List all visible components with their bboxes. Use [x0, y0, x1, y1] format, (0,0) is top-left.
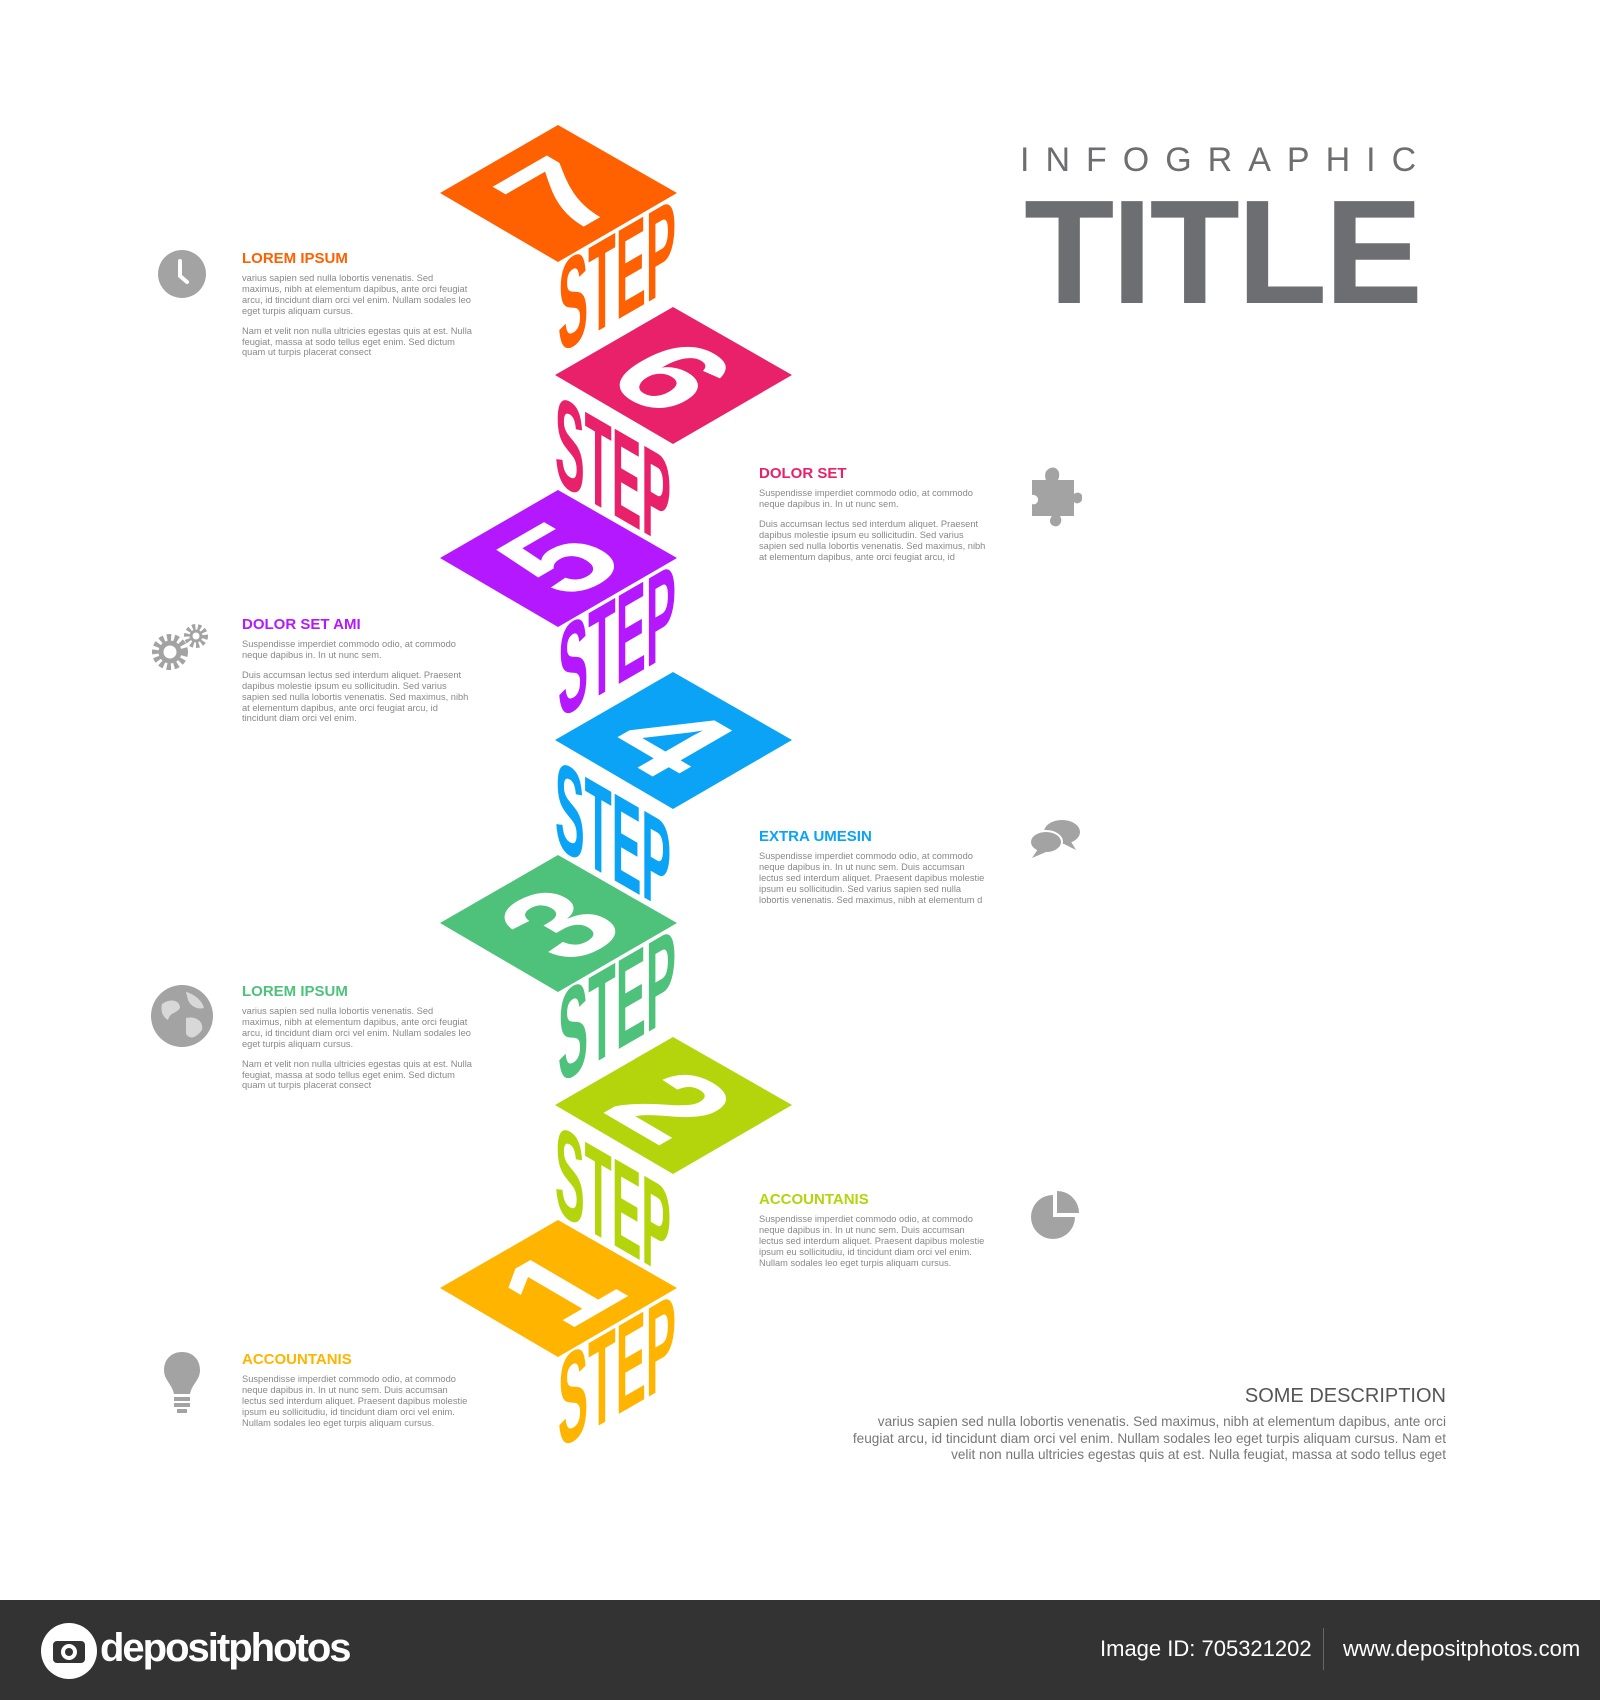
text: step 7: varius sapien sed nulla lobortis venenatis. Sed maximus, nibh at elementum dapibus, ante orci feugiat arcu, id tincidunt diam orci vel enim. Nullam sodales leo eget turpis aliquam cursus.: [242, 273, 471, 316]
step 4: [555, 672, 792, 940]
step 7: [440, 125, 677, 382]
steps staircase: STEP: [558, 901, 676, 1112]
step 6: 6: [574, 321, 768, 433]
text: step 4: EXTRA UMESIN: [759, 828, 872, 845]
step 2: [555, 1037, 792, 1305]
website: www.depositphotos.com: [1343, 1636, 1580, 1661]
description: varius sapien sed nulla lobortis venenatis. Sed maximus, nibh at elementum dapibus, ante orci: [878, 1414, 1446, 1429]
steps staircase: STEP: [558, 1266, 676, 1477]
step 3: 3: [463, 868, 657, 981]
logo: depositphotos: [100, 1626, 350, 1670]
logo: [41, 1623, 350, 1679]
text: step 6: Suspendisse imperdiet commodo odio, at commodo neque dapibus in. In ut nunc sem.: [759, 488, 973, 509]
footer bar: [0, 1600, 1600, 1700]
step 2: 2: [574, 1051, 768, 1163]
text: step 3: Nam et velit non nulla ultricies egestas quis at est. Nulla feugiat, massa at sodo tellus eget enim. Sed dictum quam ut turpis placerat consect: [242, 1059, 472, 1090]
steps staircase: STEP: [558, 536, 676, 747]
text: step 2: [759, 1191, 984, 1268]
step 2: STEP: [555, 1097, 671, 1305]
icon: gears: [152, 624, 208, 670]
text: step 7: Nam et velit non nulla ultricies egestas quis at est. Nulla feugiat, massa at sodo tellus eget enim. Sed dictum quam ut turpis placerat consect: [242, 326, 472, 357]
icon: clock: [158, 250, 206, 298]
text: step 2: ACCOUNTANIS: [759, 1191, 869, 1208]
text: step 1: Suspendisse imperdiet commodo odio, at commodo neque dapibus in. In ut nunc sem. Duis accumsan lectus sed interdum aliquet. Praesent dapibus molestie ipsum eu sollicitudiu, id tincidunt diam orci vel enim. Nullam sodales leo eget turpis aliquam cursus.: [242, 1374, 467, 1428]
text: step 5: [242, 616, 468, 723]
text: step 3: [242, 983, 472, 1090]
text: step 6: Duis accumsan lectus sed interdum aliquet. Praesent dapibus molestie ipsum eu sollicitudin. Sed varius sapien sed nulla lobortis venenatis. Sed maximus, nibh at elementum dapibus, ante orci feugiat arcu, id: [759, 519, 985, 562]
title: INFOGRAPHIC: [1020, 141, 1432, 179]
step 6: STEP: [555, 367, 671, 575]
title: TITLE: [1024, 170, 1420, 335]
text: step 5: DOLOR SET AMI: [242, 616, 361, 633]
text: step 5: Suspendisse imperdiet commodo odio, at commodo neque dapibus in. In ut nunc sem.: [242, 639, 456, 660]
step 1: [440, 1220, 677, 1477]
steps staircase: STEP: [558, 171, 676, 382]
step 1: 1: [463, 1233, 657, 1346]
description: [853, 1385, 1446, 1462]
text: step 2: Suspendisse imperdiet commodo odio, at commodo neque dapibus in. In ut nunc sem. Duis accumsan lectus sed interdum aliquet. Praesent dapibus molestie ipsum eu sollicitudiu, id tincidunt diam orci vel enim. Nullam sodales leo eget turpis aliquam cursus.: [759, 1214, 984, 1268]
text: step 7: [242, 250, 472, 357]
step 6: [555, 307, 792, 575]
text: step 6: DOLOR SET: [759, 465, 847, 482]
icon: pie chart: [1031, 1191, 1079, 1239]
text: step 7: LOREM IPSUM: [242, 250, 348, 267]
step 5: [440, 490, 677, 747]
text: step 4: Suspendisse imperdiet commodo odio, at commodo neque dapibus in. In ut nunc sem. Duis accumsan lectus sed interdum aliquet. Praesent dapibus molestie ipsum eu sollicitudin. Sed varius sapien sed nulla lobortis venenatis. Sed maximus, nibh at elementum d: [759, 851, 984, 905]
text: step 4: [759, 828, 984, 905]
text: step 5: Duis accumsan lectus sed interdum aliquet. Praesent dapibus molestie ipsum eu sollicitudin. Sed varius sapien sed nulla lobortis venenatis. Sed maximus, nibh at elementum dapibus, ante orci feugiat arcu, id tincidunt diam orci vel enim.: [242, 670, 468, 723]
icon: chat bubbles: [1031, 820, 1080, 858]
text: step 3: varius sapien sed nulla lobortis venenatis. Sed maximus, nibh at elementum dapibus, ante orci feugiat arcu, id tincidunt diam orci vel enim. Nullam sodales leo eget turpis aliquam cursus.: [242, 1006, 471, 1049]
step 4: STEP: [555, 732, 671, 940]
text: step 1: ACCOUNTANIS: [242, 1351, 352, 1368]
step 5: 5: [463, 503, 657, 616]
description: SOME DESCRIPTION: [1245, 1385, 1446, 1407]
description: feugiat arcu, id tincidunt diam orci vel enim. Nullam sodales leo eget turpis aliquam cursus. Nam et: [853, 1430, 1446, 1446]
image id: Image ID: 705321202: [1100, 1636, 1312, 1661]
icon: globe: [151, 985, 213, 1047]
text: step 1: [242, 1351, 467, 1428]
icon: puzzle: [1032, 468, 1082, 526]
text: step 6: [759, 465, 985, 562]
step 7: 7: [463, 138, 657, 251]
step 3: [440, 855, 677, 1112]
description: velit non nulla ultricies egestas quis at est. Nulla feugiat, massa at sodo tellus eget: [951, 1447, 1446, 1462]
step 4: 4: [574, 686, 768, 798]
text: step 3: LOREM IPSUM: [242, 983, 348, 1000]
icon: light bulb: [164, 1352, 200, 1413]
